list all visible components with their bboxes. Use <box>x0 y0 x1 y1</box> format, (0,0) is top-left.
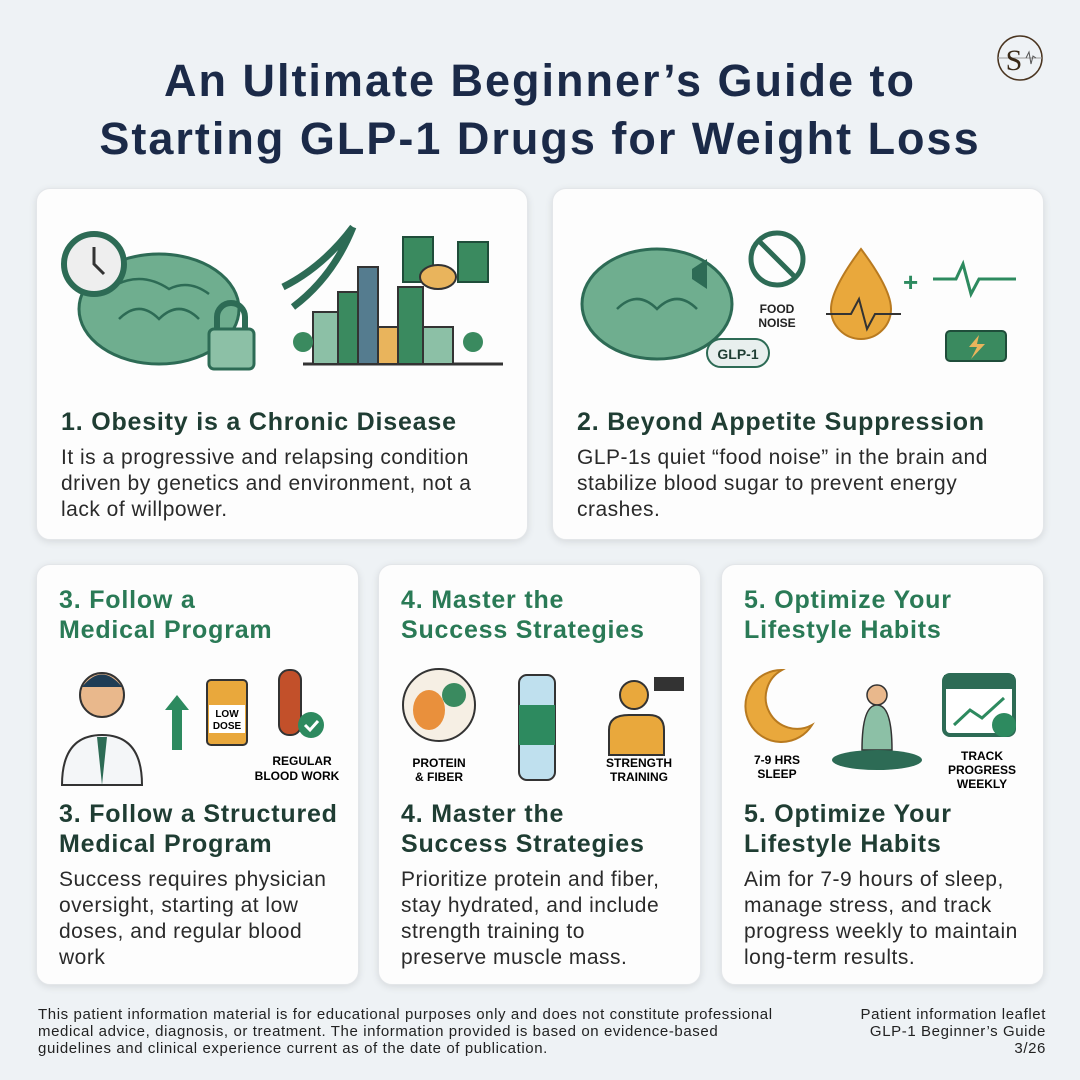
body text: stay hydrated, and include <box>401 894 659 917</box>
heading: 4. Master the <box>401 800 564 828</box>
icon: food, water bottle, strength: & FIBER <box>415 770 463 784</box>
label heading: 5. Optimize Your <box>744 586 952 614</box>
panel: obesity chronic disease <box>36 188 528 540</box>
label heading: Lifestyle Habits <box>744 616 942 644</box>
body text: progress weekly to maintain <box>744 920 1018 943</box>
icon: moon, meditation, calendar <box>744 669 1016 790</box>
icon: moon, meditation, calendar: PROGRESS <box>948 763 1016 777</box>
heading: 5. Optimize Your <box>744 800 952 828</box>
body text <box>744 868 1018 969</box>
icon: moon, meditation, calendar: SLEEP <box>757 767 797 781</box>
body text <box>61 446 471 521</box>
icon: brain with GLP-1 and food noise <box>580 230 806 368</box>
panel: lifestyle habits <box>721 564 1044 985</box>
body text <box>401 868 659 969</box>
body text <box>59 868 326 969</box>
title: An Ultimate Beginner’s Guide to <box>164 55 916 106</box>
heading: Medical Program <box>59 830 272 858</box>
body text: Aim for 7-9 hours of sleep, <box>744 868 1004 891</box>
icon: food, water bottle, strength: STRENGTH <box>606 756 672 770</box>
icon: food, water bottle, strength <box>402 668 684 784</box>
icon: doctor, arrow, dose, blood tube <box>61 669 340 786</box>
body text: crashes. <box>577 498 660 521</box>
icon: food, water bottle, strength: PROTEIN <box>412 756 466 770</box>
icon: brain with GLP-1 and food noise: FOOD <box>760 302 795 316</box>
icon: doctor, arrow, dose, blood tube: BLOOD WORK <box>255 769 340 783</box>
body text <box>577 446 988 521</box>
label heading <box>59 586 272 644</box>
heading: Success Strategies <box>401 830 645 858</box>
heading <box>401 800 645 858</box>
footer leaflet info <box>861 1006 1046 1057</box>
icon: blood drop, pulse, battery: + <box>903 267 918 297</box>
heading: 3. Follow a Structured <box>59 800 338 828</box>
icon: DNA, fast food, city <box>282 224 503 366</box>
body text: stabilize blood sugar to prevent energy <box>577 472 957 495</box>
title <box>99 55 981 164</box>
icon: moon, meditation, calendar: 7-9 HRS <box>754 753 800 767</box>
footer leaflet info: Patient information leaflet <box>861 1006 1046 1023</box>
footer leaflet info: 3/26 <box>1014 1040 1046 1057</box>
label heading: Medical Program <box>59 616 272 644</box>
icon: moon, meditation, calendar: TRACK <box>961 749 1003 763</box>
panel: success strategies <box>378 564 701 985</box>
label heading: Success Strategies <box>401 616 645 644</box>
body text: doses, and regular blood <box>59 920 302 943</box>
logo <box>997 35 1043 81</box>
label heading: 4. Master the <box>401 586 564 614</box>
footer disclaimer: guidelines and clinical experience current as of the date of publication. <box>38 1040 548 1057</box>
body text: long-term results. <box>744 946 915 969</box>
footer disclaimer <box>38 1006 773 1057</box>
body text: lack of willpower. <box>61 498 228 521</box>
panel: beyond appetite <box>552 188 1044 540</box>
label heading <box>744 586 952 644</box>
body text: oversight, starting at low <box>59 894 298 917</box>
icon: brain with clock and lock <box>61 231 256 370</box>
heading: 2. Beyond Appetite Suppression <box>577 408 985 436</box>
icon: doctor, arrow, dose, blood tube: DOSE <box>213 721 241 732</box>
footer leaflet info: GLP-1 Beginner’s Guide <box>870 1023 1046 1040</box>
title: Starting GLP-1 Drugs for Weight Loss <box>99 113 981 164</box>
icon: food, water bottle, strength: TRAINING <box>610 770 668 784</box>
icon: brain with GLP-1 and food noise: NOISE <box>758 316 796 330</box>
body text: work <box>59 946 105 969</box>
label heading: 3. Follow a <box>59 586 196 614</box>
heading: Lifestyle Habits <box>744 830 942 858</box>
body text: strength training to <box>401 920 585 943</box>
body text: preserve muscle mass. <box>401 946 627 969</box>
logo: S <box>1006 44 1022 77</box>
footer disclaimer: medical advice, diagnosis, or treatment. The information provided is based on evidence-based <box>38 1023 718 1040</box>
body text: It is a progressive and relapsing condition <box>61 446 469 469</box>
panel: medical program <box>36 564 359 985</box>
icon: doctor, arrow, dose, blood tube: REGULAR <box>272 754 332 768</box>
icon: brain with GLP-1 and food noise: GLP-1 <box>717 346 759 362</box>
body text: GLP-1s quiet “food noise” in the brain and <box>577 446 988 469</box>
icon: blood drop, pulse, battery <box>826 248 1016 362</box>
heading <box>744 800 952 858</box>
heading: 1. Obesity is a Chronic Disease <box>61 408 457 436</box>
body text: Prioritize protein and fiber, <box>401 868 659 891</box>
footer disclaimer: This patient information material is for educational purposes only and does not constitute professional <box>38 1006 773 1023</box>
heading <box>59 800 338 858</box>
label heading <box>401 586 645 644</box>
icon: doctor, arrow, dose, blood tube: LOW <box>215 709 239 720</box>
body text: driven by genetics and environment, not a <box>61 472 471 495</box>
body text: manage stress, and track <box>744 894 992 917</box>
body text: Success requires physician <box>59 868 326 891</box>
